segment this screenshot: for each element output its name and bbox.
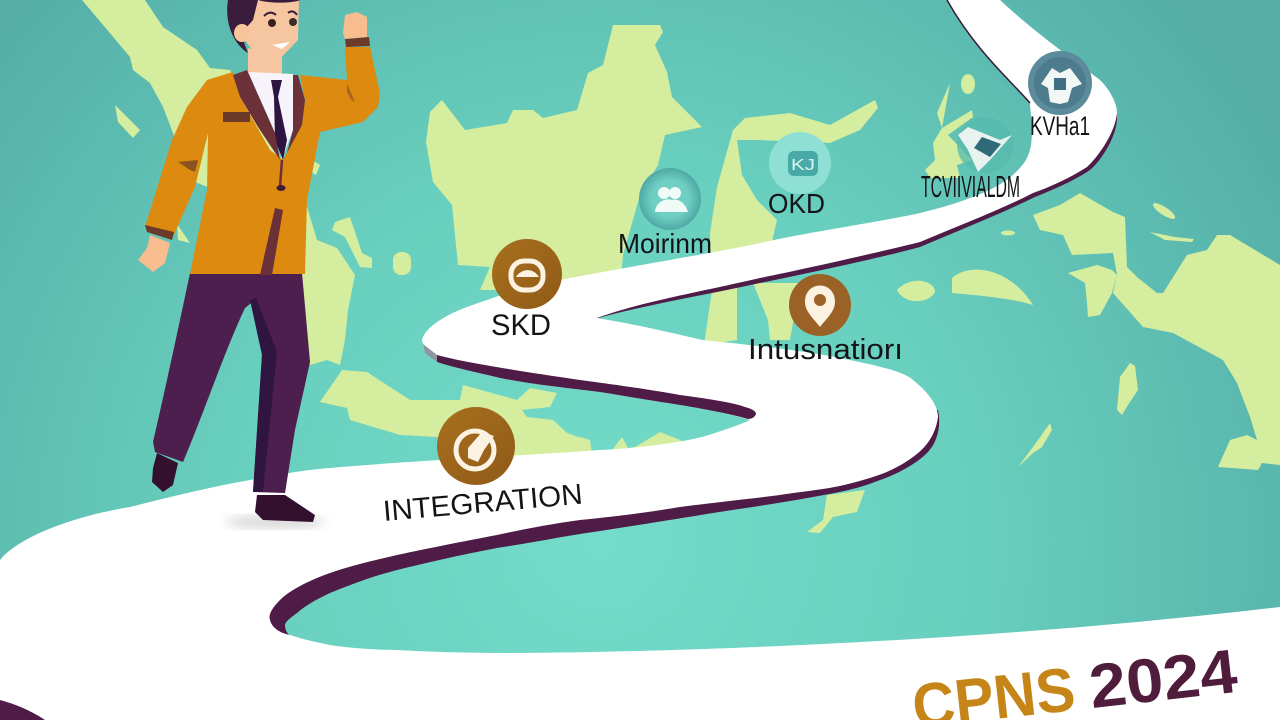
label: Intusnatiorı	[748, 334, 903, 366]
icon: document badge	[957, 117, 1013, 173]
island: Cenderawasih isle	[1068, 265, 1117, 317]
road shadow corner, bottom left	[0, 700, 45, 720]
island: Yapen	[1150, 232, 1194, 242]
step: Integration location	[748, 274, 903, 366]
road thin dark outline, top	[947, 0, 1030, 103]
title year 2024: 2024	[1086, 637, 1241, 720]
island: Bali and Lombok	[580, 432, 690, 453]
icon: card badge: KJ	[791, 157, 815, 174]
island: Buru	[952, 270, 1033, 305]
step: Tennnaldm	[921, 117, 1020, 204]
island: small isle near Papua	[1001, 230, 1015, 236]
icon: cloud badge	[492, 239, 562, 309]
island: lower Sulawesi arm	[753, 283, 800, 340]
tie	[271, 80, 287, 160]
left hand	[138, 235, 170, 272]
island: Biak	[1151, 201, 1177, 221]
ground shadow	[225, 515, 325, 529]
right eye	[289, 18, 297, 26]
blazer body and arms	[145, 47, 380, 274]
blazer centre seam	[280, 160, 282, 187]
island: Kai	[1117, 363, 1138, 415]
elbow crease	[178, 160, 198, 172]
island: Papua	[1033, 193, 1280, 470]
island: Sumatra	[82, 0, 355, 365]
head	[245, 0, 299, 62]
island: Sumatra sliver under elbow	[177, 224, 190, 243]
road shadow edge: middle bend	[437, 355, 756, 419]
island: Halmahera	[925, 83, 973, 178]
step: KVHa1	[1028, 51, 1092, 141]
label: KVHa1	[1030, 111, 1090, 141]
icon: blue emblem badge	[1028, 51, 1092, 115]
right cuff	[345, 37, 370, 47]
icon: circular arrow badge	[437, 407, 515, 485]
shadow band: lower road	[260, 410, 939, 650]
label: INTEGRATION	[382, 479, 584, 528]
island: Timor	[1018, 423, 1052, 467]
island: Sulawesi	[704, 100, 878, 345]
island: Kalimantan	[426, 25, 702, 290]
right hand	[343, 12, 367, 39]
island: Belitung	[393, 252, 411, 275]
icon: people badge	[639, 168, 701, 230]
island: Morotai	[961, 74, 975, 94]
label: SKD	[491, 309, 551, 342]
neck	[248, 48, 282, 80]
mouth	[272, 42, 290, 49]
island: Java	[320, 370, 590, 460]
title: CPNS 2024	[909, 637, 1241, 720]
man in orange blazer	[138, 0, 380, 529]
island: west isle	[115, 105, 140, 138]
right lapel	[287, 75, 305, 153]
icon: map pin badge	[789, 274, 851, 336]
island: Seram	[897, 281, 935, 301]
hair	[227, 0, 300, 53]
island: Bangka	[332, 217, 372, 268]
left cuff	[145, 225, 174, 240]
breast pocket	[223, 112, 250, 122]
island: Sumbawa	[807, 490, 865, 533]
label: OKD	[768, 188, 825, 219]
arm crease	[347, 83, 355, 102]
step: SKD	[491, 239, 562, 342]
left shoe	[152, 453, 178, 492]
left lapel	[233, 70, 280, 160]
left eye	[268, 19, 276, 27]
label: Moirinm	[618, 228, 712, 259]
blazer opening	[260, 208, 283, 275]
road side highlight at left tip	[423, 344, 437, 362]
step: INTEGRATION	[382, 407, 584, 528]
right shoe	[255, 495, 315, 522]
label: TCVIIVIALDM	[921, 169, 1020, 204]
step: OKD	[768, 132, 831, 219]
eyebrows	[264, 11, 297, 16]
island: Sumatra sliver by waist	[311, 160, 320, 175]
road shadow edge: outer bends	[260, 113, 1117, 650]
trousers	[153, 273, 310, 493]
shirt	[248, 72, 293, 160]
map of Indonesia	[82, 0, 1280, 533]
trouser shade	[250, 298, 277, 492]
button	[276, 185, 286, 191]
step: Moirinm	[618, 168, 712, 259]
shadow band: upper road	[595, 113, 1117, 319]
ear	[234, 24, 250, 42]
